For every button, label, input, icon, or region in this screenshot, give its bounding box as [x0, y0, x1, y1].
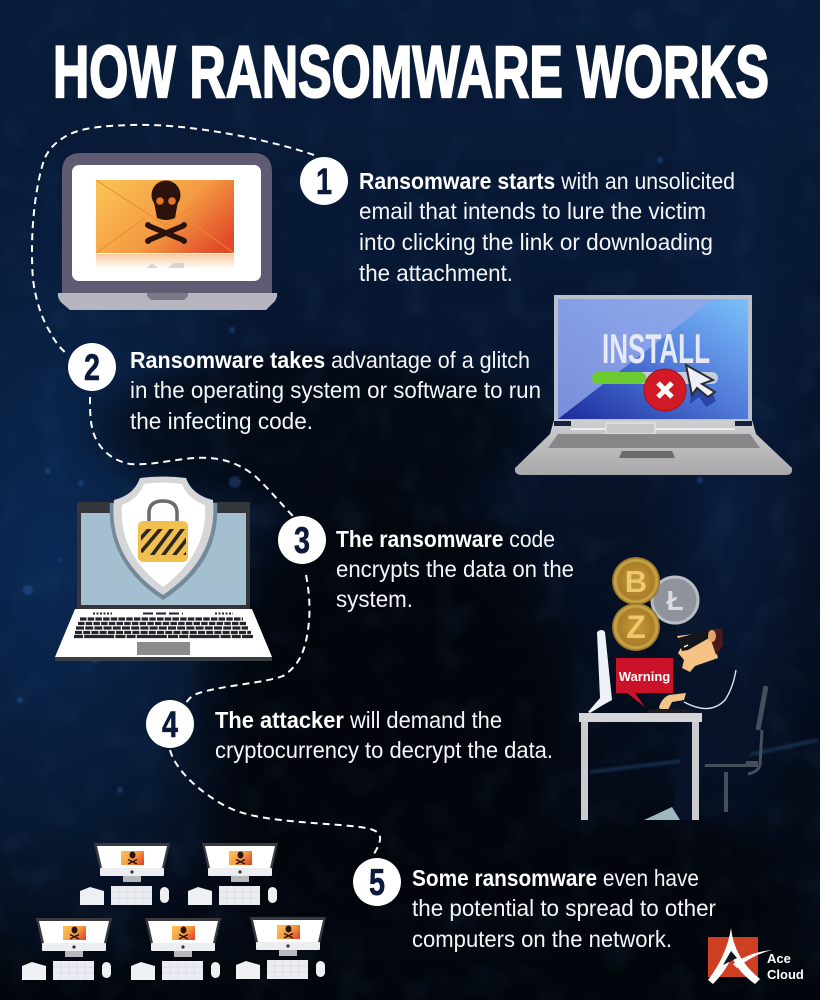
step 3: system. — [336, 586, 413, 612]
step 5: Some ransomware even have — [412, 865, 699, 891]
warning bubble — [616, 658, 673, 707]
dashed connector path — [32, 125, 380, 854]
step 2: 2 — [84, 347, 100, 388]
step 1 — [300, 157, 735, 286]
step 5 — [353, 858, 716, 952]
progress bar — [592, 372, 718, 384]
step 1: Ransomware starts with an unsolicited — [359, 168, 735, 194]
step 5: 5 — [369, 862, 385, 903]
step 4: cryptocurrency to decrypt the data. — [215, 737, 553, 763]
icon: zcash — [612, 603, 660, 651]
step 2: in the operating system or software to run — [130, 377, 541, 403]
step 2 — [68, 343, 541, 434]
icon: networked computers — [22, 843, 326, 980]
icon: hacker at desk with coins — [579, 557, 766, 820]
logo: Ace Cloud: Cloud — [767, 967, 804, 982]
hacker body — [660, 660, 755, 820]
icon: laptop with failed install — [515, 295, 792, 475]
step 3: 3 — [294, 520, 310, 561]
step 4: 4 — [162, 704, 178, 745]
step 4: The attacker will demand the — [215, 707, 502, 733]
step 3: The ransomware code — [336, 526, 555, 552]
icon: laptop with skull email — [58, 153, 277, 310]
icon: bitcoin: B — [625, 564, 647, 599]
icon: shield — [110, 476, 217, 600]
icon: zcash: Z — [626, 609, 646, 645]
step 2: the infecting code. — [130, 408, 313, 434]
icon: litecoin: Ł — [666, 585, 684, 616]
chair — [699, 686, 766, 812]
desk — [579, 713, 702, 820]
step 1: email that intends to lure the victim — [359, 198, 706, 224]
face — [677, 632, 718, 672]
step 1: the attachment. — [359, 260, 513, 286]
icon: litecoin — [652, 577, 698, 623]
step 3 — [278, 516, 574, 612]
step 3: encrypts the data on the — [336, 556, 574, 582]
logo: Ace Cloud — [708, 928, 804, 984]
icon: envelope — [96, 180, 234, 269]
step 5: the potential to spread to other — [412, 895, 716, 921]
icon: cursor — [686, 365, 716, 407]
step 5: computers on the network. — [412, 926, 672, 952]
icon: bitcoin — [612, 557, 660, 605]
icon: padlock — [138, 499, 188, 562]
logo: Ace Cloud: Ace — [767, 951, 791, 966]
install label: INSTALL — [602, 325, 710, 372]
keyboard — [74, 614, 253, 636]
icon: red error — [644, 369, 686, 411]
step 1: 1 — [316, 161, 332, 202]
step 2: Ransomware takes advantage of a glitch — [130, 347, 530, 373]
warning bubble: Warning — [619, 669, 670, 684]
monitor — [588, 630, 612, 713]
step 1: into clicking the link or downloading — [359, 229, 713, 255]
icon: laptop with shield lock — [55, 476, 272, 661]
step 4 — [146, 700, 553, 763]
